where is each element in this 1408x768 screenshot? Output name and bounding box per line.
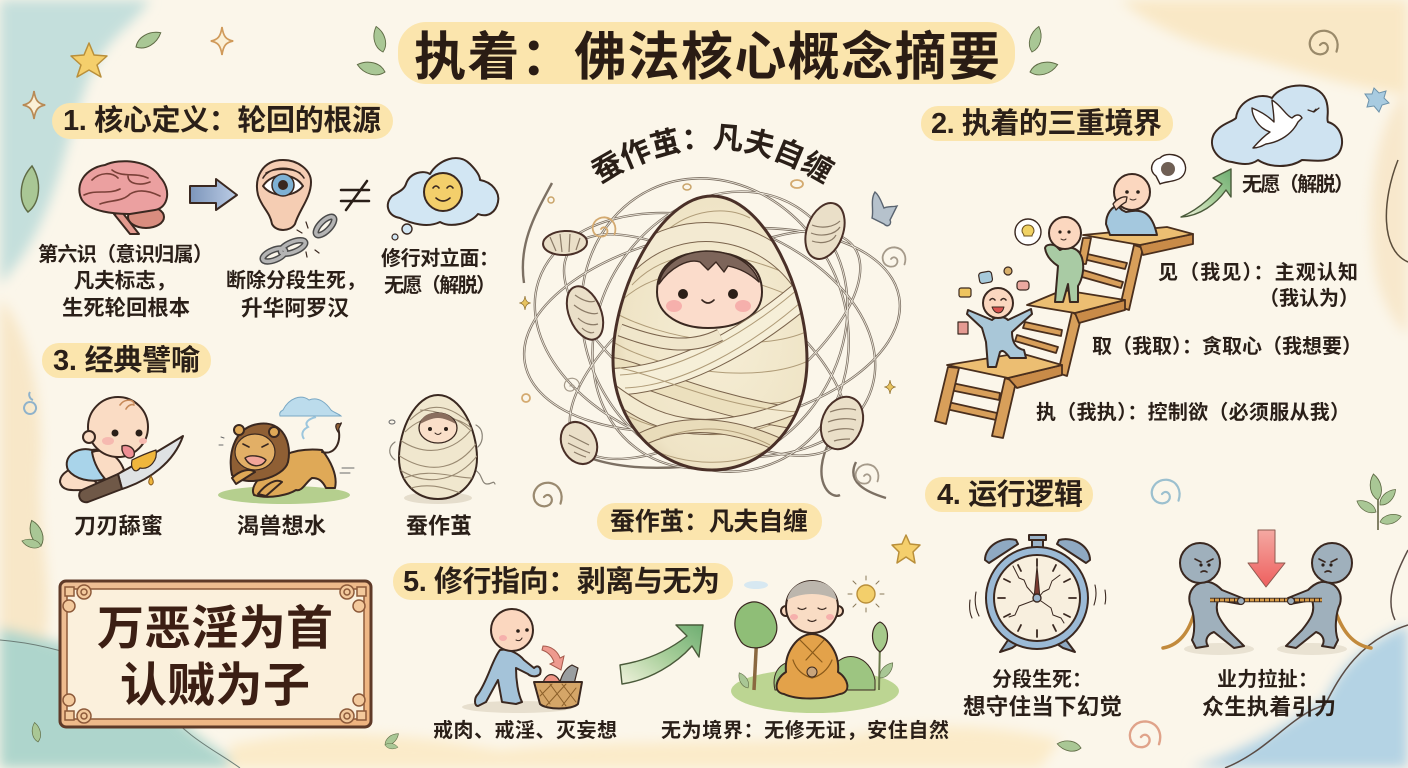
text: attachment level: 执（我执）：控制欲（必须服从我）: [1036, 401, 1350, 424]
icon: ear with eye: [257, 160, 311, 230]
arrow: brain to eye: [190, 179, 237, 210]
text: segmented death: [963, 667, 1122, 720]
illustration: person dropping food in basket: [462, 609, 582, 713]
heading: section 3: 3. 经典譬喻: [53, 344, 200, 377]
text: karma pull: 业力拉扯：: [1217, 667, 1318, 691]
label: thirsty beast: 渴兽想水: [237, 514, 326, 538]
text: sixth consciousness: 第六识（意识归属）: [38, 242, 213, 266]
text: karma pull: [1202, 667, 1336, 720]
caption pill: cocoon: 蚕作茧：凡夫自缠: [610, 507, 808, 536]
heading: section 2: 2. 执着的三重境界: [931, 107, 1162, 140]
text: non-action state: 无为境界：无修无证，安住自然: [661, 718, 949, 742]
decorative spirals and rings: [519, 180, 905, 506]
icon: smiling cloud: [388, 158, 498, 240]
illustration: cocoon with face: [610, 196, 812, 470]
arrow: towards non-action: [620, 625, 703, 684]
icon: not equal: [341, 181, 369, 210]
text: sixth consciousness: [38, 242, 213, 320]
text: segmented death: 想守住当下幻觉: [963, 694, 1122, 720]
callout: plaque: 万恶淫为首: [97, 602, 333, 654]
illustration: wooden ladder steps: [935, 227, 1193, 438]
illustration: cracked alarm clock: [970, 535, 1106, 652]
small cocoons: [542, 198, 871, 470]
cocoon wraps: [612, 282, 810, 450]
title: 执着：佛法核心概念摘要: [414, 29, 1000, 87]
text: precepts: 戒肉、戒淫、灭妄想: [433, 718, 617, 742]
arrow: ascending to liberation: [1181, 169, 1231, 217]
text: opposite of practice: 修行对立面：: [381, 246, 499, 270]
text: karma pull: 众生执着引力: [1202, 694, 1336, 720]
text: view level: [1158, 261, 1359, 310]
callout: plaque: [60, 581, 371, 727]
illustration: karma tug of war: [1163, 530, 1371, 655]
heading: section 5: 5. 修行指向：剥离与无为: [403, 565, 720, 598]
text: sixth consciousness: 生死轮回根本: [62, 296, 190, 320]
heading: section 1: 1. 核心定义：轮回的根源: [63, 104, 381, 137]
text: cutting segmented death: 断除分段生死，: [226, 268, 366, 292]
text: cutting segmented death: [226, 268, 366, 320]
panel: section 5 practice direction: [393, 563, 949, 742]
text: cutting segmented death: 升华阿罗汉: [241, 296, 349, 320]
text: grasp level: 取（我取）：贪取心（我想要）: [1092, 334, 1362, 358]
text: view level: 见（我见）：主观认知: [1158, 261, 1358, 284]
text: opposite of practice: [381, 246, 499, 297]
callout: plaque: 认贼为子: [120, 658, 310, 712]
icon: silk moth: [872, 192, 897, 226]
illustration: baby licking honey off blade: [60, 397, 183, 502]
caption pill: cocoon: [597, 503, 822, 540]
illustration: thirsty lion: [218, 397, 354, 504]
label: silkworm cocoon: 蚕作茧: [406, 514, 472, 538]
figure: celebrating grasping person: [958, 267, 1032, 367]
illustration: small cocoon: [389, 395, 495, 504]
panel: central cocoon: [519, 124, 906, 540]
text: segmented death: 分段生死：: [992, 667, 1092, 691]
label: honey on blade: 刀刃舔蜜: [74, 514, 163, 538]
icon: broken chain: [261, 214, 337, 264]
figure: thinking person in green: [1015, 217, 1083, 302]
icon: brain: [79, 161, 167, 234]
panel: section 3 classic metaphors: [42, 343, 495, 538]
heading: section 4: 4. 运行逻辑: [937, 478, 1083, 511]
panel: section 4 operating logic: [925, 477, 1371, 720]
threads around cocoon: [503, 134, 916, 517]
heading: curved cocoon title: 蚕作茧：凡夫自缠: [590, 124, 836, 185]
panel: section 1 core definition: [38, 103, 499, 320]
text: opposite of practice: 无愿（解脱）: [384, 274, 496, 297]
figure: top seeing person: [1106, 155, 1186, 235]
text: view level: （我认为）: [1259, 287, 1359, 310]
text: sixth consciousness: 凡夫标志，: [74, 270, 176, 292]
icon: cloud with dove: [1212, 86, 1342, 166]
text: liberation label: 无愿（解脱）: [1242, 173, 1354, 196]
cocoon face: [657, 251, 762, 328]
panel: section 2 three levels of attachment: [921, 86, 1362, 438]
illustration: meditating monk in nature: [731, 576, 899, 713]
